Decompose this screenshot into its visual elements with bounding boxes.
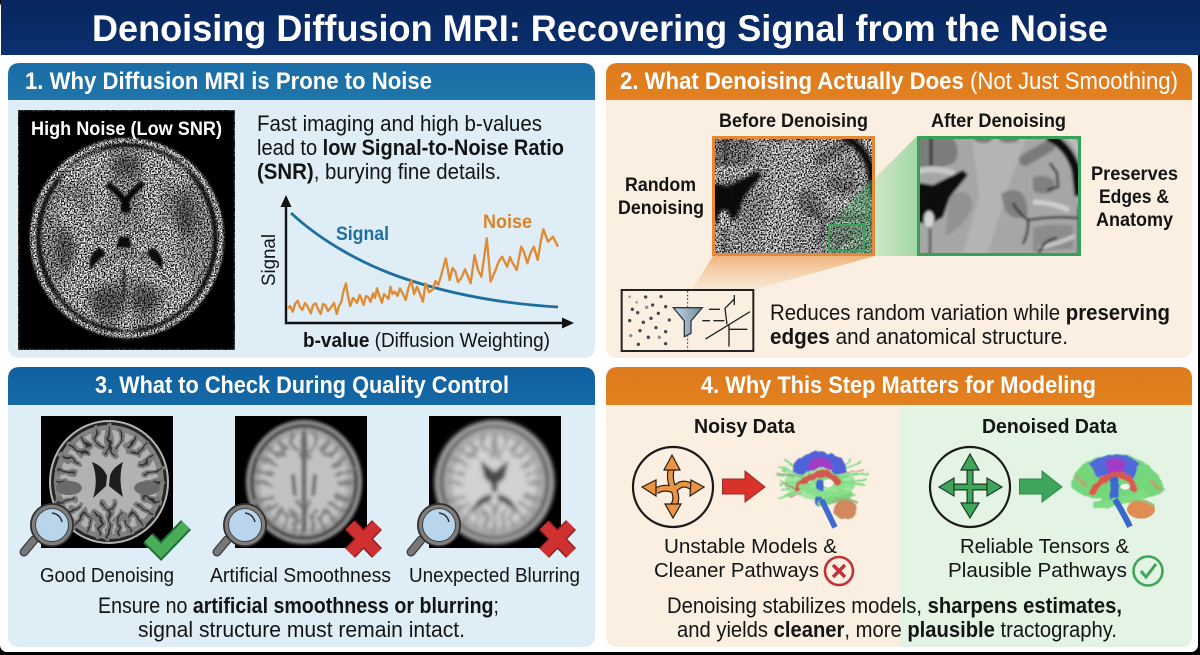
preserves label (1091, 164, 1178, 231)
quality control takeaway: Ensure no artificial smoothness or blurring; (98, 593, 499, 618)
random denoising label: Denoising (618, 198, 704, 219)
noisy data heading: Noisy Data (694, 416, 796, 438)
panel 3 header: 3. What to Check During Quality Control (95, 372, 509, 399)
noisy outcome text (654, 536, 838, 582)
modeling takeaway (667, 593, 1122, 642)
title banner (1, 0, 1200, 55)
signal curve (291, 213, 558, 307)
denoised outcome text: Reliable Tensors & (960, 536, 1130, 558)
y axis label: Signal (259, 234, 280, 286)
zoom connector: green (875, 136, 917, 256)
icon: magnifier (411, 506, 458, 552)
noisy outcome text: Unstable Models & (664, 536, 838, 558)
random denoising label: Random (625, 175, 696, 196)
quality control takeaway: signal structure must remain intact. (138, 617, 465, 642)
image labels: Unexpected Blurring (409, 565, 580, 587)
denoised data heading: Denoised Data (982, 416, 1118, 438)
icon: circled cross (825, 557, 853, 585)
preserves label: Anatomy (1096, 210, 1173, 231)
preserves label: Edges & (1099, 187, 1169, 208)
title: Denoising Diffusion MRI: Recovering Signal from the Noise (92, 8, 1108, 49)
before denoising image (712, 136, 875, 256)
after denoising image (917, 136, 1081, 256)
panel 1 header: 1. Why Diffusion MRI is Prone to Noise (25, 68, 432, 95)
good denoising brain (24, 416, 186, 552)
preserves label: Preserves (1091, 164, 1178, 185)
panel 1 header (8, 63, 595, 100)
denoised tractography brain (1071, 454, 1164, 527)
quality control takeaway (98, 593, 499, 642)
signal vs noise chart (259, 195, 574, 352)
icon: red cross (544, 525, 571, 553)
image caption: High Noise (Low SNR) (31, 119, 222, 140)
panel: what to check during quality control (8, 367, 595, 647)
icon: check mark (148, 525, 186, 551)
panel: why diffusion MRI is prone to noise (8, 63, 595, 358)
denoised half background (899, 405, 1192, 647)
denoised outcome text: Plausible Pathways (948, 560, 1127, 582)
icon: unstable tensor (633, 447, 713, 527)
artificial smoothness brain (217, 416, 377, 553)
denoised outcome text (948, 536, 1130, 582)
icon: stable tensor (930, 447, 1010, 527)
panel 3 header (8, 367, 595, 405)
zoom connector: orange (692, 256, 875, 290)
explanation text: lead to low Signal-to-Noise Ratio (257, 135, 564, 160)
modeling takeaway: and yields cleaner, more plausible tractography. (677, 617, 1117, 642)
noisy brain scan (18, 110, 235, 350)
icon: red cross (350, 525, 377, 553)
icon: magnifier (217, 506, 264, 552)
explanation text: (SNR), burying fine details. (257, 159, 501, 184)
signal label: Signal (336, 224, 389, 245)
noisy outcome text: Cleaner Pathways (654, 560, 819, 582)
panel 2 header: 2. What Denoising Actually Does (Not Just Smoothing) (620, 68, 1178, 95)
icon: circled check (1134, 556, 1162, 586)
panel 4 header (606, 367, 1192, 405)
arrow: denoised to tract (1020, 471, 1062, 502)
arrow: noisy to tract (722, 471, 765, 502)
icon: noise filter (622, 290, 753, 351)
explanation text: Fast imaging and high b-values (257, 111, 542, 136)
noisy tractography brain (777, 459, 867, 527)
image labels: Artificial Smoothness (210, 565, 391, 587)
panel: what denoising actually does (606, 63, 1192, 358)
caption text (770, 300, 1170, 349)
modeling takeaway: Denoising stabilizes models, sharpens estimates, (667, 593, 1122, 618)
noise trace (288, 229, 558, 314)
caption text: edges and anatomical structure. (770, 324, 1068, 349)
x axis label: b-value (Diffusion Weighting) (303, 330, 550, 352)
image labels: Good Denoising (40, 565, 174, 587)
panel 4 header: 4. Why This Step Matters for Modeling (701, 372, 1096, 399)
explanation text (257, 111, 564, 184)
zoom region marker (829, 225, 864, 251)
before caption: Before Denoising (719, 111, 868, 132)
after caption: After Denoising (931, 111, 1066, 132)
axes (286, 205, 565, 323)
icon: magnifier (24, 506, 71, 552)
image labels (40, 565, 580, 587)
caption text: Reduces random variation while preserving (770, 300, 1170, 325)
noise label: Noise (483, 212, 532, 233)
unexpected blurring brain (411, 416, 571, 553)
panel: why this step matters for modeling (606, 367, 1192, 647)
random denoising label (618, 175, 704, 219)
